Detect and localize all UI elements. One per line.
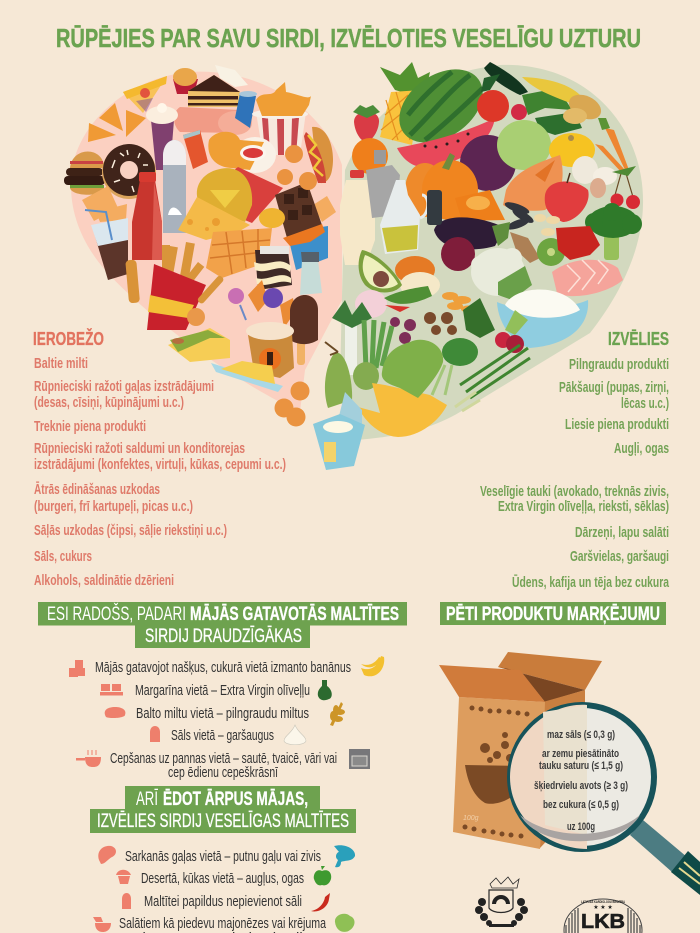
list: foods to limit: (burgeri, frī kartupeļi, picas u.c.) bbox=[34, 498, 193, 515]
mushrooms bbox=[572, 156, 617, 198]
nacho triangles bbox=[88, 103, 146, 142]
doughnut bbox=[102, 144, 156, 199]
tip: salad dressing bbox=[93, 914, 354, 933]
icon: lettuce leaf bbox=[335, 914, 354, 932]
sunflower seeds and nuts bbox=[503, 200, 560, 236]
red beans bbox=[390, 317, 416, 344]
banner: eating out: ĒDOT ĀRPUS MĀJAS, bbox=[163, 789, 308, 810]
icon: bread bbox=[105, 707, 125, 718]
orange onion bbox=[395, 256, 435, 284]
carrots bbox=[595, 118, 629, 173]
cereal bowl picture bbox=[465, 732, 520, 804]
tip: stew or bake: cep ēdienu cepeškrāsnī bbox=[168, 765, 278, 781]
tip: herbs instead of salt: Sāls vietā – garšaugus bbox=[171, 728, 274, 744]
banner: eating out: IZVĒLIES SIRDIJ VESELĪGAS MALTĪTES bbox=[97, 811, 349, 832]
logo: Latvian Society of Cardiology: LKB bbox=[581, 911, 625, 933]
pumpkin bbox=[405, 153, 505, 221]
cookies bbox=[259, 145, 317, 426]
artichoke bbox=[353, 362, 379, 390]
icon: apple bbox=[314, 866, 331, 885]
french fries bbox=[147, 242, 206, 330]
pineapple bbox=[380, 62, 430, 145]
tip: stew or bake bbox=[76, 749, 370, 781]
purple cabbage bbox=[460, 135, 516, 191]
corn bbox=[522, 77, 580, 103]
nutrition criteria text: maz sāls (≤ 0,3 g) bbox=[547, 729, 615, 741]
salmon fillet bbox=[552, 260, 623, 296]
lettuce bbox=[382, 340, 443, 398]
broccoli bbox=[585, 203, 642, 260]
pizza slice bbox=[123, 76, 167, 113]
tip: fruit for dessert: Desertā, kūkas vietā – augļus, ogas bbox=[141, 871, 304, 887]
icon: butter bbox=[100, 684, 123, 696]
tip: olive oil instead of margarine bbox=[100, 680, 332, 700]
cola cup bbox=[85, 210, 128, 280]
hot dog bbox=[304, 127, 333, 183]
whipped cream can bbox=[163, 140, 186, 233]
weight label: 100g bbox=[463, 815, 479, 822]
almonds bbox=[442, 292, 475, 312]
cucumber bbox=[481, 62, 528, 95]
list: foods to limit: Treknie piena produkti bbox=[34, 418, 146, 435]
logo: Latvian Society of Cardiology bbox=[564, 899, 642, 933]
hazelnuts bbox=[424, 312, 457, 335]
fried chicken bucket bbox=[252, 82, 311, 155]
cauliflower bbox=[471, 248, 532, 300]
strawberry bbox=[353, 105, 380, 142]
tip: no added salt: Maltītei papildus nepievienot sāli bbox=[144, 894, 302, 910]
nutrition criteria text bbox=[534, 729, 628, 833]
beetroot bbox=[441, 237, 475, 271]
banner: eating out: ARĪ bbox=[136, 789, 158, 810]
tip: fruit for dessert bbox=[116, 866, 331, 887]
banner: home cooked meals bbox=[38, 602, 407, 648]
icon: sugar cubes bbox=[69, 660, 85, 677]
nutrition criteria text: bez cukura (≤ 0,5 g) bbox=[543, 799, 619, 811]
icon: chili pepper bbox=[311, 893, 330, 911]
list: foods to limit: Rūpnieciski ražoti gaļas izstrādājumi bbox=[34, 378, 214, 395]
ketchup bottle bbox=[132, 172, 162, 260]
asparagus bbox=[364, 320, 392, 368]
radish small bbox=[511, 104, 527, 120]
banner: home cooked meals: ESI RADOŠS, PADARI bbox=[47, 603, 186, 625]
burger bbox=[64, 152, 105, 195]
eggplant bbox=[434, 217, 510, 249]
coconut and kiwi bbox=[510, 232, 565, 266]
popsicle bbox=[290, 295, 318, 365]
nutrition criteria text: uz 100g bbox=[567, 821, 595, 833]
banner: home cooked meals: MĀJĀS GATAVOTĀS MALTĪTES bbox=[190, 604, 399, 625]
banner: home cooked meals: SIRDIJ DRAUDZĪGĀKAS bbox=[145, 626, 302, 647]
milk bottle bbox=[340, 170, 375, 265]
nutrition criteria text: ar zemu piesātināto bbox=[542, 748, 619, 760]
milkshake bbox=[146, 103, 178, 170]
blue can bbox=[235, 91, 257, 128]
magnifying glass bbox=[510, 705, 700, 895]
icon: oven bbox=[349, 749, 370, 769]
tip: salad dressing: Salātiem kā piedevu majonēzes vai krējuma bbox=[119, 916, 327, 932]
avocado bbox=[359, 250, 402, 292]
tip: wholegrain flour bbox=[105, 702, 345, 726]
banner: eating out bbox=[90, 786, 356, 833]
red soda can bbox=[183, 130, 208, 169]
lollipop and candies bbox=[187, 280, 295, 328]
fried chicken on plate bbox=[208, 132, 276, 173]
handle bbox=[630, 820, 700, 895]
chocolate spread jar bbox=[254, 246, 292, 290]
list: foods to limit: Baltie milti bbox=[34, 355, 88, 372]
lens bbox=[510, 705, 654, 849]
wafer cake bbox=[168, 328, 230, 362]
list: foods to limit: izstrādājumi (konfektes, virtuļi, kūkas, cepumi u.c.) bbox=[34, 456, 286, 473]
icon: steak bbox=[98, 846, 116, 864]
herbs bbox=[522, 88, 582, 135]
tip: bananas instead of sugar: Mājās gatavojot našķus, cukurā vietā izmanto banānus bbox=[95, 660, 351, 676]
heart left half: foods to limit bbox=[64, 65, 342, 426]
cheese wedge bbox=[178, 197, 250, 240]
list heading: limit: IEROBEŽO bbox=[33, 328, 104, 349]
list heading: choose: IZVĒLIES bbox=[608, 329, 669, 349]
green beans bbox=[463, 298, 495, 338]
sugar sack bbox=[246, 322, 294, 378]
list: foods to limit: (desas, cīsiņi, kūpinājumi u.c.) bbox=[34, 394, 184, 411]
yellow squash bbox=[549, 133, 595, 167]
list: foods to limit: Ātrās ēdināšanas uzkodas bbox=[34, 481, 160, 498]
list: foods to limit: Sāļās uzkodas (čipsi, sāļie riekstiņi u.c.) bbox=[34, 522, 227, 539]
icon: frying pan bbox=[76, 750, 101, 767]
muffin bbox=[173, 68, 198, 94]
list: foods to limit: Alkohols, saldinātie dzērieni bbox=[34, 572, 174, 589]
apple bbox=[545, 173, 589, 222]
icon: salad bowl bbox=[93, 917, 111, 932]
icon: garlic bbox=[284, 725, 306, 745]
cottage cheese bowl bbox=[497, 289, 588, 348]
potatoes bbox=[563, 90, 605, 124]
list: foods to limit: Sāls, cukurs bbox=[34, 548, 92, 565]
olive oil jar bbox=[380, 180, 442, 254]
tip: wholegrain flour: Balto miltu vietā – pilngraudu miltus bbox=[136, 706, 309, 722]
cherries bbox=[610, 166, 640, 209]
chocolate bar bbox=[275, 182, 328, 270]
watermelon slice bbox=[397, 118, 495, 167]
salmon steak bbox=[503, 155, 563, 211]
tip: stew or bake: Cepšanas uz pannas vietā – sautē, tvaicē, vāri vai bbox=[110, 751, 337, 767]
leek bbox=[332, 300, 372, 375]
nutrition criteria text: šķiedrvielu avots (≥ 3 g) bbox=[534, 780, 628, 792]
tip: poultry or fish bbox=[98, 845, 355, 867]
tomato bbox=[477, 90, 509, 122]
list: foods to choose bbox=[480, 356, 669, 591]
icon: salt shaker bbox=[150, 726, 160, 742]
icon: wheat bbox=[330, 702, 345, 726]
white onion bbox=[400, 272, 440, 298]
logo: Latvian coat of arms bbox=[475, 877, 528, 927]
grey juicer bbox=[366, 150, 400, 218]
radishes bbox=[495, 310, 528, 353]
chips bag bbox=[196, 167, 283, 223]
cereal box bbox=[439, 652, 602, 849]
tip: bananas instead of sugar bbox=[69, 656, 384, 677]
tip: herbs instead of salt bbox=[150, 725, 306, 745]
watermelon bbox=[386, 54, 496, 158]
list: foods to choose: Augļi, ogas bbox=[614, 440, 669, 457]
icon: fish bbox=[334, 845, 355, 867]
pear bbox=[325, 342, 352, 408]
heart right half: healthy foods bbox=[313, 54, 643, 470]
list: foods to limit: Rūpnieciski ražoti saldumi un konditorejas bbox=[34, 440, 245, 457]
icon: salt shaker bbox=[122, 893, 131, 909]
parsley bbox=[432, 338, 478, 395]
salt shaker bbox=[300, 252, 322, 295]
churro bbox=[125, 260, 140, 303]
yogurt cup bbox=[313, 392, 365, 470]
tip: olive oil instead of margarine: Margarīna vietā – Extra Virgin olīveļļu bbox=[135, 683, 310, 699]
garlic bbox=[355, 290, 387, 318]
list: foods to limit bbox=[34, 355, 286, 589]
logo: Latvian Society of Cardiology: LATVIJAS KARDIOLOGU BIEDRĪBA bbox=[581, 899, 625, 904]
spring onions bbox=[455, 345, 530, 411]
banana bbox=[358, 383, 447, 437]
waffle bbox=[197, 228, 272, 305]
butter dish bbox=[211, 361, 283, 392]
tip: poultry or fish: Sarkanās gaļas vietā – putnu gaļu vai zivis bbox=[125, 849, 321, 865]
peas and chilli bbox=[384, 286, 432, 312]
red pepper bbox=[556, 226, 600, 260]
list: foods to choose: lēcas u.c.) bbox=[621, 395, 669, 412]
nutrition criteria text: tauku saturu (≤ 1,5 g) bbox=[539, 760, 623, 772]
icon: oil jug bbox=[318, 680, 332, 700]
logo: Latvian Society of Cardiology: ★ ★ ★ bbox=[593, 904, 613, 911]
icon: banana bbox=[361, 656, 384, 676]
orange bbox=[352, 138, 388, 174]
cake slice bbox=[188, 65, 248, 107]
crackers bbox=[82, 186, 336, 222]
sausage bbox=[174, 107, 252, 135]
box dots bbox=[462, 706, 530, 838]
green cabbage bbox=[497, 120, 551, 170]
icon: cupcake bbox=[116, 870, 131, 884]
